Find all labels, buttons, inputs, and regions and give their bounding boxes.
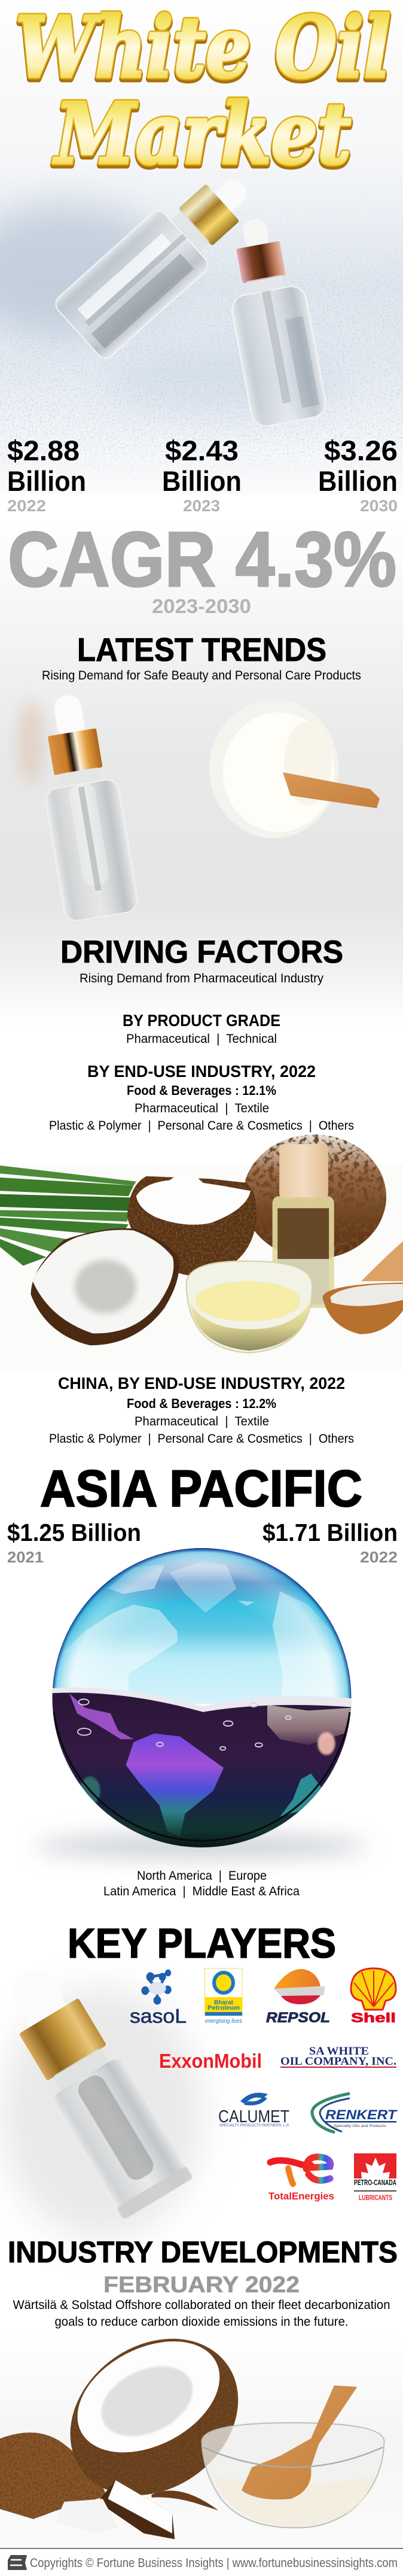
segment: by end-use industry [49,1062,354,1133]
title [16,0,390,186]
title: Market [53,85,351,183]
icon: clear dropper bottle with gold collar [52,155,269,362]
logo: bharat petroleum: energising lives [205,2018,242,2025]
coconut pieces [55,2480,218,2539]
stat 2030: Billion [318,465,398,497]
logo: calumet: CALUMET [218,2107,289,2126]
segment: china by end-use industry: Plastic & Polymer | Personal Care & Cosmetics | Others [49,1432,354,1446]
regional values: $1.71 Billion [262,1519,398,1546]
logo: calumet [218,2093,289,2128]
regional values [7,1519,398,1566]
logo: bharat petroleum: Petroleum [207,2005,240,2011]
segment: by product grade: BY PRODUCT GRADE [123,1011,280,1030]
shadow under globe [34,1834,369,1858]
upper coconut half [127,1168,257,1276]
logo: sasol [130,1970,187,2027]
logo: calumet: SPECIALTY PRODUCTS PARTNERS, L.P. [219,2124,289,2128]
segment: by end-use industry: Plastic & Polymer | Personal Care & Cosmetics | Others [49,1119,354,1133]
regional values: $1.25 Billion [7,1519,141,1546]
logo: sa white oil company [280,2045,396,2068]
icon: dropper bottle photo [17,690,139,923]
company logos [130,1968,398,2202]
palm leaves [0,1166,136,1266]
logo: totalenergies: TotalEnergies [268,2190,334,2202]
heading: industry developments: Wärtsilä & Solstad Offshore collaborated on their fleet decarbonization [13,2298,390,2312]
glass bowl [202,2386,384,2528]
segment: by end-use industry: Pharmaceutical | Textile [135,1102,269,1115]
heading: latest trends [42,631,361,682]
logo: petro-canada lubricants [354,2153,396,2202]
heading: driving factors: DRIVING FACTORS [60,934,343,970]
coconut husk [0,2432,106,2519]
heading: industry developments: INDUSTRY DEVELOPMENTS [8,2235,398,2269]
back coconut [243,1134,386,1259]
heading: industry developments: goals to reduce carbon dioxide emissions in the future. [55,2315,348,2329]
logo: renkert [312,2093,398,2132]
segment: china by end-use industry: CHINA, BY END-USE INDUSTRY, 2022 [58,1374,345,1392]
title: Market [53,87,351,186]
segment: by end-use industry: Food & Beverages : 12.1% [127,1083,276,1098]
logo: exxonmobil: ExxonMobil [159,2050,262,2072]
logo: renkert: Specialty Oils and Products [334,2125,386,2128]
stat 2022 [7,435,86,515]
logo: renkert: RENKERT [325,2107,398,2122]
logo: bharat petroleum [204,1968,242,2025]
heading: driving factors [60,934,343,985]
logo: shell [351,1968,396,2025]
stat 2030: $3.26 [324,435,398,466]
segment: by product grade [123,1011,280,1046]
stat 2022: 2022 [7,497,46,515]
photo: coconut, husk and bowl of oil [0,2309,403,2548]
heading: asia pacific: ASIA PACIFIC [40,1460,362,1518]
segment: china by end-use industry: Food & Beverages : 12.2% [127,1396,276,1411]
regional values: 2022 [360,1548,398,1566]
bowl of oil [187,1261,312,1353]
title: Market [53,85,351,183]
logo: bharat petroleum: Bharat [214,1999,234,2006]
heading: driving factors: Rising Demand from Pharmaceutical Industry [80,972,323,985]
stat 2022: Billion [7,465,86,497]
footer [0,2548,403,2570]
heading: latest trends: Rising Demand for Safe Beauty and Personal Care Products [42,669,361,682]
stat 2023: $2.43 [165,435,239,466]
segment: china by end-use industry [49,1374,354,1446]
page background [0,129,403,995]
other regions [103,1869,300,1898]
logo: sa white oil company: OIL COMPANY, INC. [280,2055,396,2068]
icon: clear dropper bottle with rose collar [216,212,328,429]
oil bottle with cork [273,1144,334,1308]
coconut half [47,2309,261,2525]
logo: sasol: sasoL [130,2005,187,2027]
logo: shell: Shell [351,2010,396,2025]
segment: by product grade: Pharmaceutical | Technical [126,1032,277,1046]
heading: key players: KEY PLAYERS [68,1920,336,1967]
icon: fortune business insights logo [8,2555,27,2570]
wooden spoon [322,1241,403,1334]
heading: industry developments [8,2235,398,2329]
icon: cream jar with wooden spatula [209,699,380,838]
regional values: 2021 [7,1548,44,1566]
icon: globe half-filled with oil [38,1548,360,1854]
stat 2030 [318,435,398,515]
segment: china by end-use industry: Pharmaceutical | Textile [135,1415,269,1428]
stat 2023: Billion [162,465,242,497]
logo: sa white oil company: SA WHITE [309,2045,369,2058]
lower coconut half [31,1228,179,1345]
market size stats [7,435,398,515]
stat 2023 [162,435,242,515]
other regions: North America | Europe [137,1869,267,1883]
logo: repsol: REPSOL [266,2010,330,2026]
icon: angled dropper bottle [0,1953,203,2239]
logo: repsol [266,1969,330,2026]
logo: totalenergies [268,2157,334,2202]
photo: coconuts and oil [0,1134,403,1371]
CAGR figure: 2023-2030 [152,595,251,617]
stat 2030: 2030 [360,497,398,515]
segment: by end-use industry: BY END-USE INDUSTRY, 2022 [87,1062,316,1081]
other regions: Latin America | Middle East & Africa [103,1885,300,1898]
stat 2022: $2.88 [7,435,80,466]
heading: latest trends: LATEST TRENDS [77,631,326,668]
stat 2023: 2023 [183,497,220,515]
heading: industry developments: FEBRUARY 2022 [103,2272,300,2298]
